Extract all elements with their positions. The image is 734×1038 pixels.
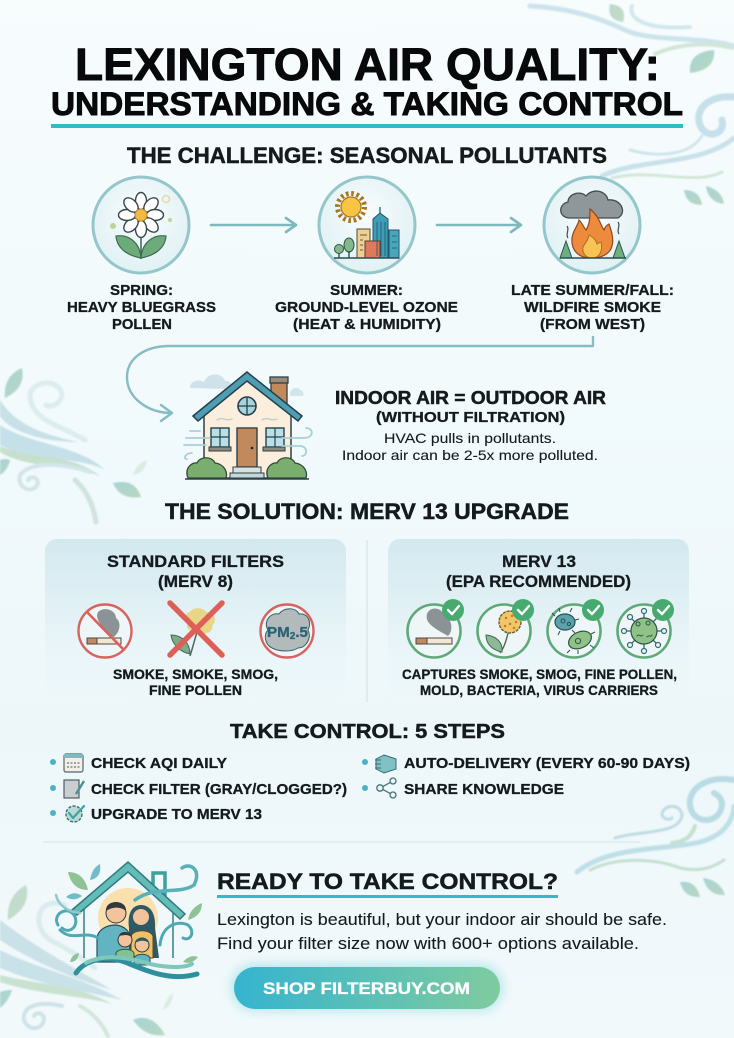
label: spring: POLLEN bbox=[112, 316, 172, 333]
text: indoor air: Indoor air can be 2-5x more polluted. bbox=[342, 447, 598, 463]
label: summer bbox=[275, 282, 458, 333]
heading: take control: TAKE CONTROL: 5 STEPS bbox=[230, 721, 505, 743]
title: UNDERSTANDING & TAKING CONTROL bbox=[51, 86, 683, 122]
step: share knowledge bbox=[362, 778, 564, 798]
panel: standard filters bbox=[45, 539, 346, 704]
heading: the challenge: THE CHALLENGE: SEASONAL POLLUTANTS bbox=[127, 143, 607, 168]
heading: merv 13 bbox=[446, 552, 631, 591]
icon: captured pollen bbox=[478, 599, 534, 658]
heading: standard filters: (MERV 8) bbox=[158, 572, 233, 591]
icon: PM2.5 cloud: PM bbox=[267, 624, 290, 641]
caption: standard filter list: FINE POLLEN bbox=[149, 682, 242, 698]
button: shop filterbuy: SHOP FILTERBUY.COM bbox=[263, 979, 470, 998]
text: indoor air: (WITHOUT FILTRATION) bbox=[376, 409, 565, 426]
panel: merv 13 bbox=[388, 539, 689, 704]
divider between panels bbox=[366, 540, 368, 702]
heading: merv 13: MERV 13 bbox=[502, 552, 576, 571]
heading: standard filters: STANDARD FILTERS bbox=[107, 552, 284, 571]
icon: summer sun and city bbox=[319, 177, 415, 273]
heading: ready to take control: READY TO TAKE CONTROL? bbox=[217, 869, 558, 894]
step: share knowledge: SHARE KNOWLEDGE bbox=[404, 781, 564, 798]
label: spring: HEAVY BLUEGRASS bbox=[67, 299, 216, 316]
label: late summer and fall: (FROM WEST) bbox=[540, 316, 645, 333]
decorative swirl: bottom left bbox=[0, 885, 173, 1036]
caption: merv 13 captures: CAPTURES SMOKE, SMOG, FINE POLLEN, bbox=[402, 666, 677, 682]
caption: standard filter list: SMOKE, SMOKE, SMOG, bbox=[113, 666, 278, 682]
label: spring bbox=[67, 282, 216, 333]
text: call to action body: Find your filter size now with 600+ options available. bbox=[217, 934, 639, 953]
step: auto-delivery: AUTO-DELIVERY (EVERY 60-90 DAYS) bbox=[404, 755, 690, 772]
divider above call to action bbox=[43, 841, 640, 843]
title bbox=[51, 39, 683, 128]
icon: PM2.5 cloud: .5 bbox=[295, 624, 308, 641]
decorative swirl: top right bbox=[530, 4, 734, 205]
step: upgrade to merv 13: UPGRADE TO MERV 13 bbox=[91, 806, 262, 823]
heading: the solution: THE SOLUTION: MERV 13 UPGRADE bbox=[165, 499, 569, 524]
icon: spring flower bbox=[93, 177, 189, 273]
text: indoor air: HVAC pulls in pollutants. bbox=[384, 430, 556, 446]
button: shop filterbuy bbox=[232, 965, 502, 1010]
decorative swirl: left middle bbox=[0, 368, 147, 522]
label: summer: SUMMER: bbox=[330, 282, 403, 299]
text: call to action body: Lexington is beautiful, but your indoor air should be safe. bbox=[217, 910, 667, 929]
icon: family in protected house bbox=[56, 862, 202, 977]
caption: merv 13 captures: MOLD, BACTERIA, VIRUS CARRIERS bbox=[420, 682, 658, 698]
text: indoor air bbox=[335, 388, 606, 463]
arrow: spring to summer bbox=[211, 218, 296, 232]
icon: captured smoke bbox=[408, 599, 464, 658]
label: summer: GROUND-LEVEL OZONE bbox=[275, 299, 458, 316]
caption: standard filter list bbox=[113, 666, 278, 698]
decorative swirl: lower right bbox=[577, 779, 734, 897]
icon: crossed out pollen flower bbox=[170, 603, 222, 656]
icon: no smoking bbox=[78, 604, 132, 658]
caption: merv 13 captures bbox=[402, 666, 677, 698]
arrow: seasons into the house bbox=[127, 337, 593, 421]
icon: captured bacteria bbox=[548, 599, 604, 658]
heading: standard filters bbox=[107, 552, 284, 591]
title: LEXINGTON AIR QUALITY: bbox=[75, 39, 660, 90]
heading: merv 13: (EPA RECOMMENDED) bbox=[446, 572, 631, 591]
label: late summer and fall: WILDFIRE SMOKE bbox=[524, 299, 661, 316]
label: late summer and fall bbox=[511, 282, 674, 333]
label: late summer and fall: LATE SUMMER/FALL: bbox=[511, 282, 674, 299]
arrow: summer to fall bbox=[437, 218, 521, 232]
label: summer: (HEAT & HUMIDITY) bbox=[293, 316, 441, 333]
label: spring: SPRING: bbox=[110, 282, 173, 299]
text: indoor air: INDOOR AIR = OUTDOOR AIR bbox=[335, 388, 606, 408]
icon: PM2.5 cloud: 2 bbox=[290, 631, 296, 642]
icon: house bbox=[184, 372, 312, 479]
step: check aqi daily: CHECK AQI DAILY bbox=[91, 755, 227, 772]
icon: wildfire smoke bbox=[544, 177, 640, 273]
icon: PM2.5 cloud bbox=[260, 604, 314, 658]
step: check filter: CHECK FILTER (GRAY/CLOGGED?) bbox=[91, 781, 347, 798]
text: call to action body bbox=[217, 910, 667, 953]
icon: captured virus bbox=[618, 599, 674, 658]
